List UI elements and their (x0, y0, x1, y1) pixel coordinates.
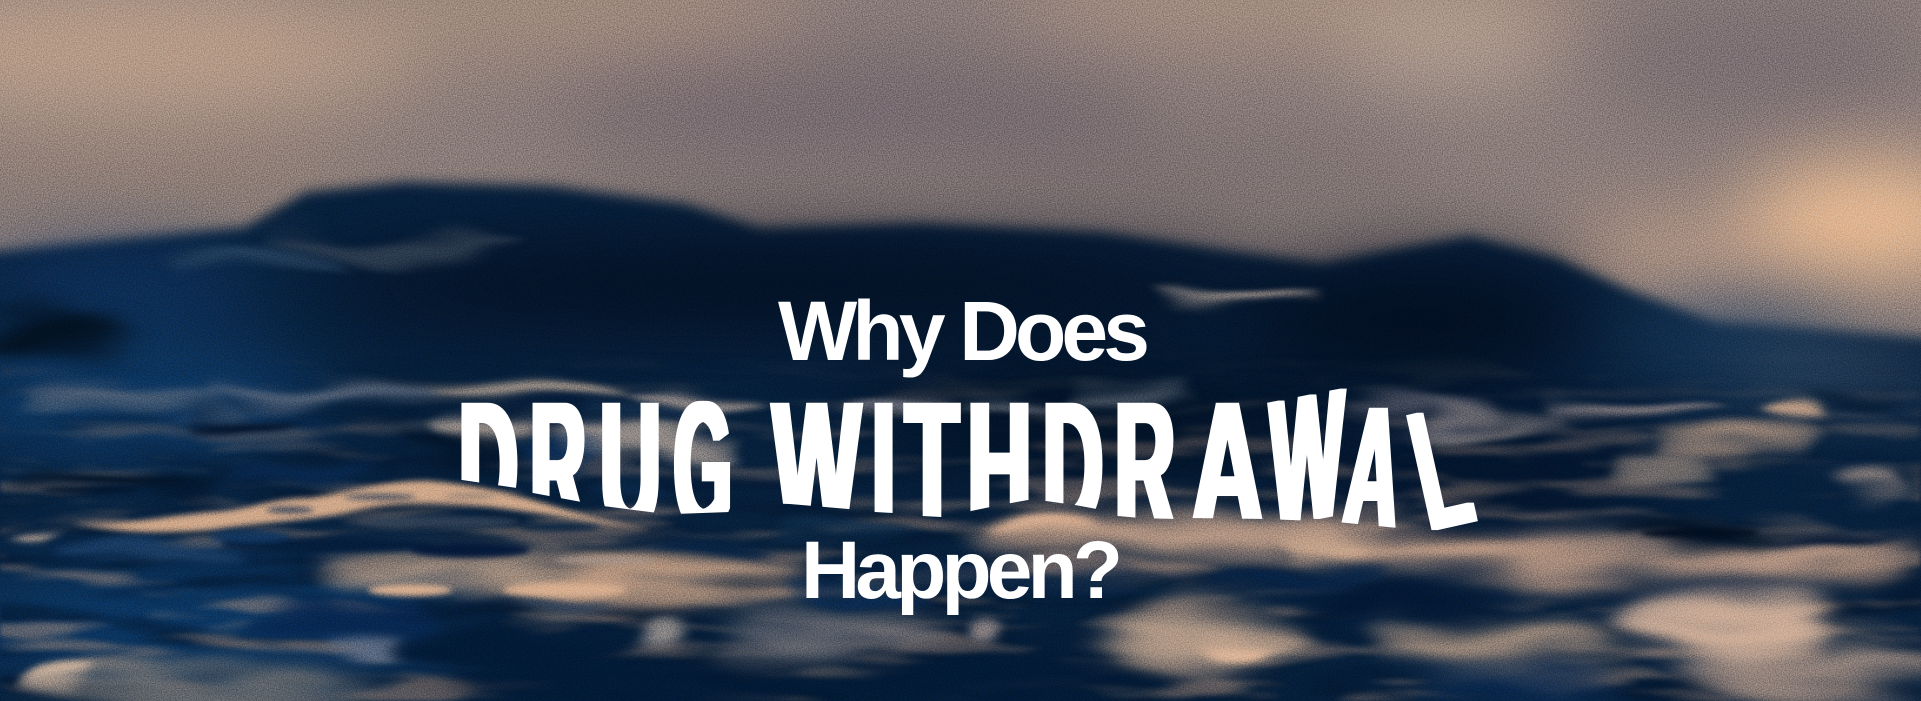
wave-cut heading: DRUG WITHDRAWAL: H (968, 364, 1032, 567)
wave-cut heading: DRUG WITHDRAWAL: D (1043, 363, 1103, 567)
wave-cut heading: DRUG WITHDRAWAL: W (773, 363, 861, 567)
sky (0, 0, 1921, 360)
wave-cut heading: DRUG WITHDRAWAL: W (1270, 349, 1344, 567)
water tones (0, 243, 1921, 701)
heading: Happen?: Happen? (801, 525, 1123, 616)
water streak texture (0, 362, 1921, 701)
wave silhouette (0, 182, 1921, 701)
wave-cut heading: DRUG WITHDRAWAL (461, 388, 1478, 530)
wave-cut heading: DRUG WITHDRAWAL: G (674, 364, 732, 567)
wave-cut heading: DRUG WITHDRAWAL: R (1115, 363, 1175, 567)
wave-cut heading: DRUG WITHDRAWAL: I (872, 363, 895, 567)
wave-cut heading: DRUG WITHDRAWAL: A (1337, 368, 1409, 572)
wave-cut heading: DRUG WITHDRAWAL: T (905, 365, 959, 567)
wave-cut heading: DRUG WITHDRAWAL: R (530, 364, 586, 567)
title block (459, 284, 1485, 616)
wave-cut heading: DRUG WITHDRAWAL: L (1396, 371, 1485, 567)
wave-cut heading: DRUG WITHDRAWAL: A (1191, 365, 1264, 568)
main crest (40, 481, 1760, 597)
soft highlights and shadows (0, 240, 1921, 701)
wave-cut heading: DRUG WITHDRAWAL: U (600, 365, 661, 568)
heading: Why Does: Why Does (778, 284, 1150, 378)
wave-cut heading: DRUG WITHDRAWAL: D (459, 363, 518, 567)
